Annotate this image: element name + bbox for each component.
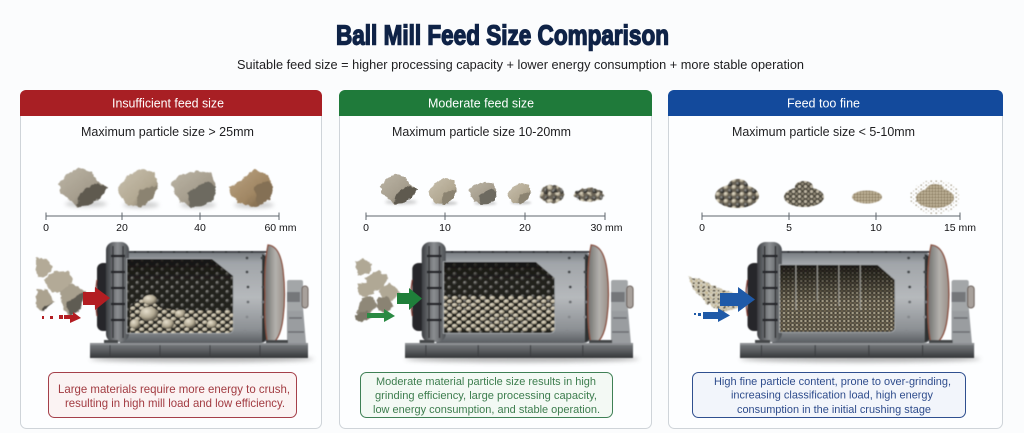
callout: consumption in the initial crushing stage <box>737 404 931 416</box>
panel: moderate feed size <box>339 90 652 428</box>
size scale: 0 <box>363 222 369 234</box>
ball mill illustration <box>90 242 314 362</box>
max particle size: Maximum particle size > 25mm <box>81 124 254 139</box>
callout: Moderate material particle size results in high <box>376 376 596 388</box>
ball mill illustration <box>405 242 639 362</box>
arrow: feed in <box>83 287 110 310</box>
panel background <box>20 90 322 428</box>
size scale <box>363 212 623 234</box>
size scale: 20 <box>519 222 531 234</box>
size scale: 10 <box>870 222 882 234</box>
feed rocks <box>36 258 85 317</box>
header bar <box>339 90 652 116</box>
header label: Insufficient feed size <box>112 96 224 110</box>
size scale <box>699 212 976 234</box>
panel: feed too fine <box>668 90 1003 428</box>
rock samples <box>380 174 604 205</box>
arrow: small feed <box>694 308 730 322</box>
header bar <box>20 90 322 116</box>
header label: Feed too fine <box>787 96 860 110</box>
arrow: feed in <box>720 287 755 312</box>
callout <box>360 372 612 418</box>
size scale: 15 mm <box>944 222 976 234</box>
max particle size: Maximum particle size 10-20mm <box>392 124 571 139</box>
callout: low energy consumption, and stable operation. <box>373 404 600 416</box>
ball mill illustration <box>740 242 981 362</box>
fine feed stream <box>688 276 742 312</box>
callout <box>692 372 966 418</box>
panel: insufficient feed size <box>20 90 322 428</box>
callout: increasing classification load, high energy <box>731 390 934 402</box>
arrow: small feed <box>367 309 395 322</box>
size scale: 40 <box>194 222 206 234</box>
size scale: 5 <box>786 222 792 234</box>
callout: grinding efficiency, large processing capacity, <box>375 390 597 402</box>
callout: resulting in high mill load and low efficiency. <box>65 396 285 410</box>
panel background <box>340 90 652 428</box>
size scale: 30 mm <box>590 222 623 234</box>
callout: High fine particle content, prone to over-grinding, <box>714 376 951 388</box>
callout <box>48 372 296 418</box>
fine material samples <box>715 179 960 214</box>
feed rocks <box>355 258 400 322</box>
size scale: 10 <box>439 222 451 234</box>
callout: Large materials require more energy to crush, <box>58 382 290 396</box>
rock samples <box>58 168 274 208</box>
arrow: small feed <box>42 312 81 323</box>
size scale: 0 <box>43 222 49 234</box>
size scale: 20 <box>116 222 128 234</box>
panel background <box>668 90 1002 428</box>
title: Ball Mill Feed Size Comparison <box>336 20 669 50</box>
size scale: 60 mm <box>264 222 297 234</box>
size scale <box>43 212 297 234</box>
header bar <box>668 90 1003 116</box>
max particle size: Maximum particle size < 5-10mm <box>732 124 915 139</box>
header label: Moderate feed size <box>428 96 534 110</box>
arrow: feed in <box>397 288 422 310</box>
subtitle: Suitable feed size = higher processing capacity + lower energy consumption + more stable operation <box>237 58 804 72</box>
size scale: 0 <box>699 222 705 234</box>
